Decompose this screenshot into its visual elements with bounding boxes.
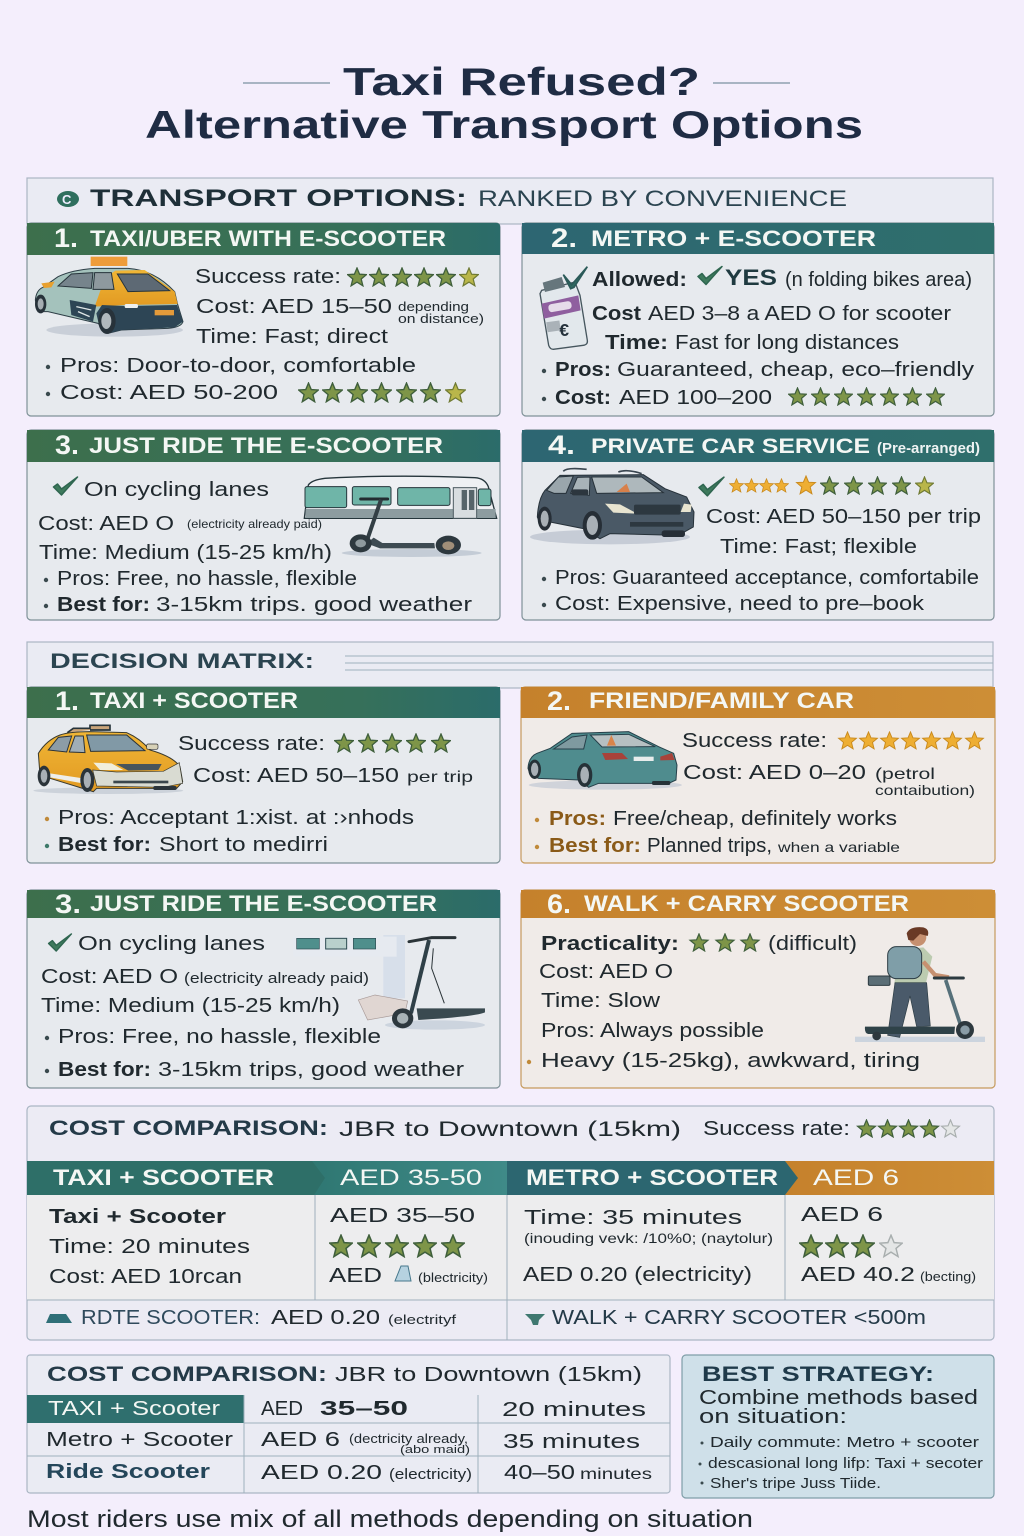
card header: JUST RIDE THE E-SCOOTER xyxy=(90,891,437,916)
rating: check and stars xyxy=(699,476,933,496)
card header xyxy=(522,223,994,254)
icon: taxi front view xyxy=(33,725,183,794)
heading: best strategy: BEST STRATEGY: xyxy=(702,1363,934,1386)
pros: Pros: xyxy=(555,359,611,381)
heading: cost comparison xyxy=(47,1363,642,1386)
best for: Best for: xyxy=(549,835,641,857)
stat: cost: Cost: AED 50–150 per trip xyxy=(706,506,981,528)
column: taxi price xyxy=(329,1205,488,1287)
heading: transport options: RANKED BY CONVENIENCE xyxy=(478,186,847,211)
heading: cost comparison: JBR to Downtown (15km) xyxy=(339,1118,681,1141)
card: walk + carry scooter xyxy=(521,889,995,1088)
stat: success rate xyxy=(195,266,478,288)
pros: Pros: Guaranteed acceptance, comfortabile xyxy=(555,567,979,589)
best for: Best for: xyxy=(57,594,150,616)
strategy list: Daily commute: Metro + scooter xyxy=(710,1434,979,1451)
card header: JUST RIDE THE E-SCOOTER xyxy=(89,433,443,458)
card header xyxy=(522,430,994,462)
column: taxi price: AED 35–50 xyxy=(330,1205,475,1227)
column: taxi + scooter: Time: 20 minutes xyxy=(49,1236,250,1258)
stat: cost: Cost: AED O xyxy=(38,513,174,535)
stat: cost: Cost: AED 15–50 xyxy=(196,296,392,318)
pros: Pros: Acceptant 1:xist. at :›nhods xyxy=(58,807,414,829)
table header band: AED 6 xyxy=(813,1165,899,1190)
icon: teal sedan rear view xyxy=(528,732,682,790)
row: ride scooter: minutes xyxy=(580,1466,652,1483)
best for: Planned trips, xyxy=(647,835,772,857)
heading: transport options: TRANSPORT OPTIONS: xyxy=(90,185,467,212)
pros xyxy=(535,808,897,830)
best for: 3-15km trips. good weather xyxy=(156,594,472,616)
stat: time: Time: Medium (15-25 km/h) xyxy=(41,995,340,1017)
card header: TAXI/UBER WITH E-SCOOTER xyxy=(90,226,446,251)
row: taxi + scooter xyxy=(48,1398,646,1421)
row: ride scooter: RDTE SCOOTER: xyxy=(81,1307,260,1329)
cons: Heavy (15-25kg), awkward, tiring xyxy=(541,1050,920,1072)
best for xyxy=(44,594,472,616)
row: ride scooter: (electrityf xyxy=(388,1312,456,1327)
row: taxi + scooter: 35–50 xyxy=(320,1398,408,1420)
best for xyxy=(45,834,328,856)
card header: 2. xyxy=(551,223,577,253)
stat: success rate xyxy=(178,733,450,755)
strategy list xyxy=(698,1434,983,1492)
card header xyxy=(27,889,500,919)
stat: cost: (electricity already paid) xyxy=(184,970,369,987)
intro text xyxy=(699,1387,978,1428)
best for: Short to medirri xyxy=(159,834,328,856)
stat: time xyxy=(605,332,899,354)
column: metro price xyxy=(800,1204,976,1286)
row: metro + scooter: 35 minutes xyxy=(503,1431,640,1453)
card header: 2. xyxy=(547,686,571,716)
check: on cycling lanes: On cycling lanes xyxy=(78,933,265,955)
title: Alternative Transport Options xyxy=(145,104,863,147)
icon: person walking with scooter xyxy=(855,927,985,1042)
icon: section badge xyxy=(57,191,79,207)
card header: 3. xyxy=(55,430,79,460)
check: on cycling lanes: On cycling lanes xyxy=(84,479,269,501)
card header xyxy=(521,889,995,919)
stat: cost: on distance) xyxy=(398,311,484,326)
column: metro + scooter: (inouding vevk: /10%0; (naytolur) xyxy=(524,1230,773,1246)
stat: success rate xyxy=(682,730,983,752)
stat: cost xyxy=(38,513,322,535)
row: taxi + scooter: AED xyxy=(261,1398,303,1420)
table header band xyxy=(27,1161,994,1195)
row: metro + scooter: (abo maid) xyxy=(400,1444,470,1456)
card header: WALK + CARRY SCOOTER xyxy=(584,891,909,916)
stat: cost: Cost: AED 0–20 xyxy=(683,762,866,784)
column: metro + scooter: AED 0.20 (electricity) xyxy=(523,1264,752,1286)
row: metro + scooter: (dectricity already, xyxy=(349,1431,468,1446)
stat: success rate: Success rate: xyxy=(178,733,325,755)
panel: decision matrix xyxy=(27,642,993,688)
column: taxi + scooter xyxy=(49,1206,250,1288)
stat: cost: Cost: AED 50–150 xyxy=(193,765,399,787)
cost rating xyxy=(46,382,465,404)
column: taxi price: AED xyxy=(329,1265,382,1287)
icon: metro train and e-scooter xyxy=(304,476,497,557)
column: taxi price: (blectricity) xyxy=(418,1270,488,1285)
icon: grey suv xyxy=(530,469,694,544)
card header: 1. xyxy=(54,223,78,253)
row: ride scooter: (electricity) xyxy=(389,1466,472,1483)
card header: METRO + E-SCOOTER xyxy=(591,226,876,251)
title xyxy=(145,61,863,147)
stat: allowed yes: YES xyxy=(725,265,777,290)
stat: allowed yes xyxy=(592,265,972,291)
pros: Free/cheap, definitely works xyxy=(613,808,897,830)
row: ride scooter xyxy=(46,1307,456,1329)
column: metro price: AED 6 xyxy=(801,1204,883,1226)
icon: metro strip, box and e-scooter xyxy=(293,935,485,1030)
pros: Guaranteed, cheap, eco–friendly xyxy=(617,359,974,381)
stat: allowed yes: Allowed: xyxy=(592,269,687,291)
stat: allowed yes: (n folding bikes area) xyxy=(785,269,972,291)
stat: time: Time: Slow xyxy=(541,990,661,1012)
row: ride scooter: AED 0.20 xyxy=(261,1462,382,1484)
pros: Pros: Free, no hassle, flexible xyxy=(58,1026,381,1048)
row: taxi + scooter: TAXI + Scooter xyxy=(48,1398,220,1420)
footer note: Most riders use mix of all methods depending on situation xyxy=(27,1506,753,1533)
stat: cost: Cost xyxy=(592,303,641,325)
icon: metro card bottle xyxy=(540,267,587,349)
row: ride scooter: Ride Scooter xyxy=(46,1461,210,1483)
row: ride scooter xyxy=(46,1461,652,1484)
stat: time: Time: Fast; flexible xyxy=(720,536,917,558)
stat: practicality xyxy=(541,933,857,955)
table header band: TAXI + SCOOTER xyxy=(53,1165,274,1190)
panel: cost comparison table xyxy=(27,1106,994,1340)
panel: best strategy xyxy=(682,1355,994,1498)
stat: cost: contaibution) xyxy=(875,782,975,798)
card: matrix 2 friend/family car xyxy=(521,686,995,863)
heading: decision matrix: DECISION MATRIX: xyxy=(50,650,314,673)
column: metro price: AED 40.2 xyxy=(801,1264,915,1286)
icon: section badge: C xyxy=(62,192,72,207)
heading: cost comparison xyxy=(49,1117,959,1141)
stat: success rate: Success rate: xyxy=(682,730,827,752)
card header: (Pre-arranged) xyxy=(877,440,980,457)
check: on cycling lanes xyxy=(54,477,269,501)
row: metro + scooter: Metro + Scooter xyxy=(46,1429,233,1451)
card header: TAXI + SCOOTER xyxy=(90,688,298,713)
stat: time: Time: xyxy=(605,332,668,354)
row: ride scooter: 40–50 xyxy=(504,1462,575,1484)
row: walk + carry: WALK + CARRY SCOOTER <500m xyxy=(552,1307,926,1329)
heading: cost comparison: Success rate: xyxy=(703,1118,850,1140)
cost rating xyxy=(542,387,944,409)
title: Taxi Refused? xyxy=(343,61,700,104)
best for xyxy=(45,1059,464,1081)
best for: when a variable xyxy=(777,839,900,855)
stat: cost: Cost: AED O xyxy=(41,966,178,988)
stat: cost: depending xyxy=(398,299,469,314)
row: ride scooter: AED 0.20 xyxy=(271,1307,380,1329)
card: 1 taxi/uber with e-scooter xyxy=(27,223,500,416)
card: 2 metro + e-scooter xyxy=(522,223,994,416)
table rows xyxy=(27,1395,244,1423)
pros: Pros: Door-to-door, comfortable xyxy=(60,355,416,377)
stat: time: Time: Medium (15-25 km/h) xyxy=(39,542,332,564)
stat: cost xyxy=(683,762,975,798)
stat: cost: Cost: AED O xyxy=(539,961,673,983)
stat: practicality: (difficult) xyxy=(768,933,857,955)
stat: cost xyxy=(196,296,484,326)
stat: success rate: Success rate: xyxy=(195,266,341,288)
card header: PRIVATE CAR SERVICE xyxy=(591,435,870,458)
pros xyxy=(542,359,974,381)
stat: cost xyxy=(193,765,473,787)
card header xyxy=(27,223,500,255)
row: metro + scooter xyxy=(46,1429,640,1456)
cost rating: Cost: AED 50-200 xyxy=(60,382,278,404)
column: taxi + scooter: Cost: AED 10rcan xyxy=(49,1266,242,1288)
table cell background xyxy=(27,1195,994,1300)
card header: 6. xyxy=(547,889,571,919)
best for xyxy=(535,835,900,857)
cost rating: AED 100–200 xyxy=(619,387,772,409)
card header: FRIEND/FAMILY CAR xyxy=(589,688,854,713)
stat: cost: (electricity already paid) xyxy=(187,517,322,531)
row: metro + scooter: AED 6 xyxy=(261,1429,340,1451)
stat: time: Time: Fast; direct xyxy=(196,326,389,348)
card header: 4. xyxy=(548,430,575,460)
heading: cost comparison: COST COMPARISON: xyxy=(49,1117,328,1140)
cost rating: Cost: xyxy=(555,387,611,409)
panel: cost comparison summary xyxy=(27,1355,670,1493)
cons: Cost: Expensive, need to pre–book xyxy=(555,593,925,615)
table header band: METRO + SCOOTER xyxy=(526,1165,778,1190)
check: on cycling lanes xyxy=(49,933,265,955)
column: metro + scooter xyxy=(523,1207,773,1286)
stat: time: Fast for long distances xyxy=(675,332,899,354)
row: taxi + scooter: 20 minutes xyxy=(502,1399,646,1421)
pros: Pros: xyxy=(549,808,606,830)
best for: Best for: xyxy=(58,1059,151,1081)
best for: 3-15km trips, good weather xyxy=(158,1059,464,1081)
stat: cost xyxy=(41,966,369,988)
card: 4 private car service xyxy=(522,430,994,620)
icon: metro card bottle: € xyxy=(559,320,569,340)
heading: cost comparison: COST COMPARISON: xyxy=(47,1363,327,1386)
card header xyxy=(27,430,500,462)
card header: 1. xyxy=(55,686,79,716)
stat: practicality: Practicality: xyxy=(541,933,679,955)
stat: cost: (petrol xyxy=(875,766,935,783)
column: metro price: (becting) xyxy=(920,1269,976,1284)
stat: cost: AED 3–8 a AED O for scooter xyxy=(648,303,951,325)
intro text: on situation: xyxy=(699,1406,847,1428)
stat: cost: per trip xyxy=(407,769,473,786)
card header xyxy=(521,686,995,718)
card header xyxy=(27,686,500,718)
column: metro + scooter: Time: 35 minutes xyxy=(524,1207,742,1229)
strategy list: Sher's tripe Juss Tiide. xyxy=(710,1475,881,1492)
card: matrix 3 just ride the e-scooter xyxy=(27,889,500,1088)
best for: Best for: xyxy=(58,834,151,856)
panel: transport options xyxy=(27,178,993,224)
pros: Pros: Always possible xyxy=(541,1020,764,1042)
card header: 3. xyxy=(55,889,81,919)
card: matrix 1 taxi + scooter xyxy=(27,686,500,863)
table header band: AED 35-50 xyxy=(340,1165,482,1190)
strategy list: descasional long lifp: Taxi + secoter xyxy=(708,1455,983,1472)
heading: cost comparison: JBR to Downtown (15km) xyxy=(335,1364,642,1386)
column: taxi + scooter: Taxi + Scooter xyxy=(49,1206,226,1228)
heading: transport options xyxy=(90,185,847,212)
pros: Pros: Free, no hassle, flexible xyxy=(57,568,357,590)
intro text: Combine methods based xyxy=(699,1387,978,1409)
icon: yellow taxi rear view xyxy=(35,257,183,337)
card: 3 just ride the e-scooter xyxy=(27,430,500,620)
